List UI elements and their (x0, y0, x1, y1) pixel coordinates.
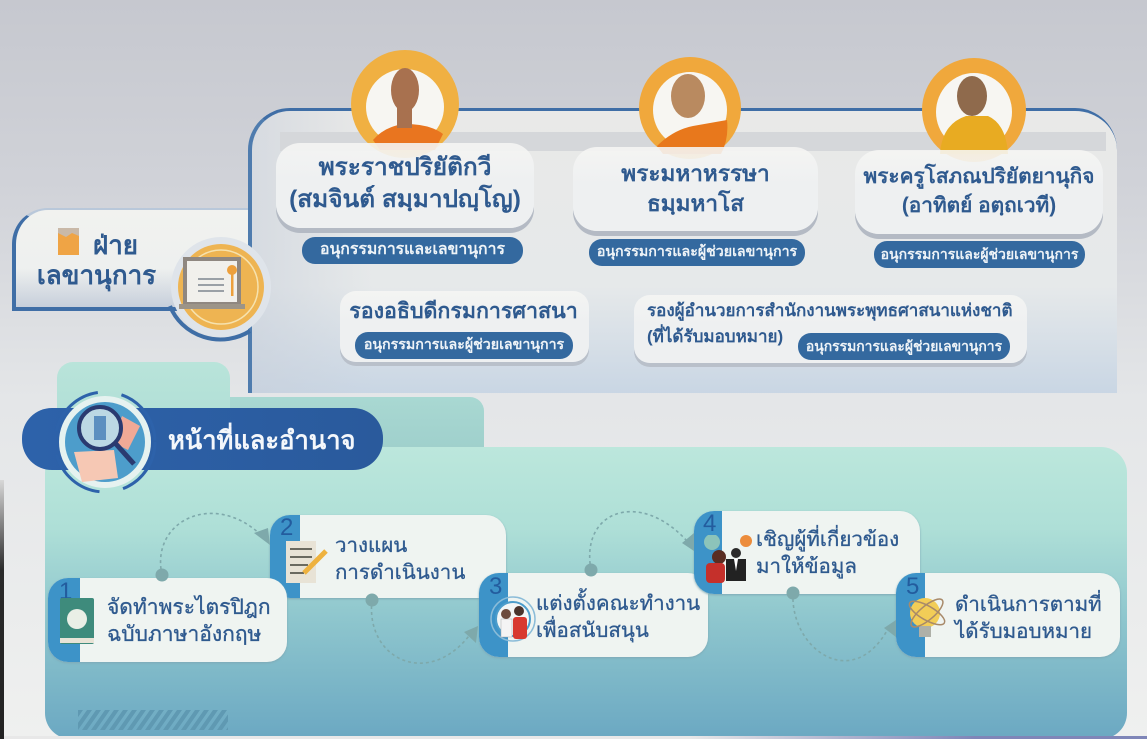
icon: magnifier medallion (59, 391, 151, 494)
portrait 3 (922, 58, 1026, 162)
card: member 2 (573, 147, 818, 231)
portrait 1 (351, 50, 459, 158)
icon: checklist (286, 541, 328, 583)
step text (756, 524, 899, 579)
step 1 (48, 578, 287, 662)
role pill 3 (874, 241, 1085, 268)
secretariat text (37, 230, 156, 292)
step text: เชิญผู้ที่เกี่ยวข้อง (756, 528, 899, 551)
role pill 3: อนุกรรมการและผู้ช่วยเลขานุการ (881, 246, 1078, 262)
icon: team (490, 596, 536, 642)
step text: แต่งตั้งคณะทำงาน (536, 592, 700, 615)
deputy director title (647, 301, 1012, 346)
step text (335, 534, 466, 584)
icon: laptop medallion (168, 237, 270, 342)
role pill 1 (302, 237, 523, 264)
tab: back left (57, 362, 230, 452)
card: member 3 (855, 150, 1103, 234)
step text: จัดทำพระไตรปิฎก (107, 596, 271, 619)
role pill 4: อนุกรรมการและผู้ช่วยเลขานุการ (364, 337, 564, 353)
strip (48, 578, 80, 662)
step text (536, 588, 700, 642)
portrait 2 (639, 57, 741, 159)
title banner (22, 408, 383, 470)
tab: back right (230, 397, 484, 449)
strip (270, 515, 300, 598)
step text: ดำเนินการตามที่ (955, 593, 1102, 616)
name 3: (อาทิตย์ อตฺถเวที) (902, 194, 1056, 217)
icon: book (60, 598, 94, 644)
strip (694, 511, 722, 594)
secretariat panel (248, 108, 1117, 393)
name 2 (621, 161, 770, 216)
bottom edge (0, 736, 1147, 739)
step text: มาให้ข้อมูล (756, 555, 857, 578)
role pill 2: อนุกรรมการและผู้ช่วยเลขานุการ (597, 244, 797, 260)
role pill 5 (798, 333, 1010, 360)
name 1 (289, 154, 521, 213)
strip (896, 573, 925, 657)
number: 1 (59, 578, 72, 605)
step text: ได้รับมอบหมาย (955, 620, 1092, 643)
step text (954, 590, 1102, 643)
secretariat text: ฝ่าย (93, 230, 138, 260)
step 2 (270, 515, 506, 598)
secretariat label (12, 208, 248, 311)
name 2: ธมฺมหาโส (647, 191, 744, 216)
number: 3 (489, 573, 502, 600)
icon: light bulb (908, 598, 946, 637)
step 3 (479, 573, 708, 657)
step text: วางแผน (335, 534, 407, 557)
left screen edge (0, 480, 4, 739)
card: deputy director NOB (634, 295, 1027, 363)
strip (479, 573, 508, 657)
step text: การดำเนินงาน (335, 561, 465, 584)
name 1: พระราชปริยัติกวี (319, 154, 491, 181)
powers panel (45, 362, 1127, 736)
card: deputy director-general (340, 291, 589, 362)
main teal panel (45, 447, 1127, 739)
step 5 (896, 573, 1120, 657)
step text (107, 594, 271, 646)
step text: ฉบับภาษาอังกฤษ (107, 623, 261, 646)
title text: หน้าที่และอำนาจ (168, 427, 355, 455)
icon: people talking (704, 535, 752, 583)
icon: folder (58, 228, 79, 255)
shaded band (280, 132, 1106, 151)
name 3: พระครูโสภณปริยัตยานุกิจ (864, 165, 1094, 188)
deputy director title: (ที่ได้รับมอบหมาย) (647, 327, 783, 346)
number: 5 (906, 573, 919, 600)
deputy title: รองอธิบดีกรมการศาสนา (349, 299, 578, 323)
hatch decoration (78, 710, 228, 730)
card: member 1 (276, 143, 534, 228)
role pill 1: อนุกรรมการและเลขานุการ (320, 241, 505, 258)
role pill 2 (589, 239, 805, 266)
role pill 4 (355, 332, 573, 359)
secretariat text: เลขานุการ (37, 260, 156, 290)
step text: เพื่อสนับสนุน (536, 619, 649, 642)
role pill 5: อนุกรรมการและผู้ช่วยเลขานุการ (806, 338, 1002, 354)
step 4 (694, 511, 920, 594)
deputy director title: รองผู้อำนวยการสำนักงานพระพุทธศาสนาแห่งชาติ (647, 301, 1012, 320)
name 3 (864, 164, 1094, 217)
name 1: (สมจินต์ สมฺมาปญฺโญ) (289, 186, 521, 213)
name 2: พระมหาหรรษา (621, 161, 770, 186)
